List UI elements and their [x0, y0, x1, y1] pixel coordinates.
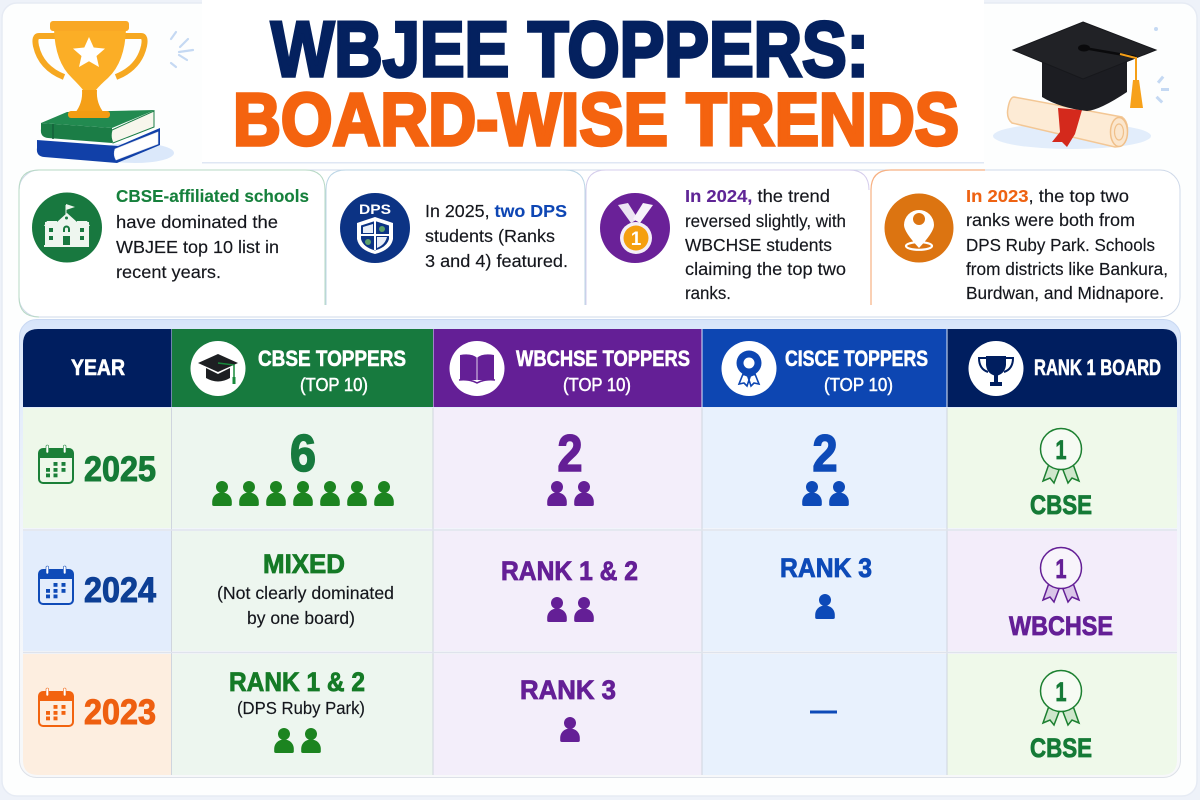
- CISCE result 2023: none: [810, 710, 837, 714]
- CBSE result 2023: (DPS Ruby Park): [237, 698, 365, 718]
- text: DPS insight: 3 and 4) featured.: [425, 251, 568, 271]
- text: 2024 insight: WBCHSE students: [685, 235, 832, 255]
- year 2024: 2024: [84, 571, 156, 610]
- panel: DPS insight: [326, 170, 585, 305]
- year 2023: 2023: [84, 693, 156, 732]
- rank 1 badge: WBCHSE 2024: WBCHSE: [1009, 611, 1113, 641]
- CISCE count 2025: 2: [812, 425, 838, 483]
- header: rank 1 board: RANK 1 BOARD: [1034, 355, 1161, 380]
- table header: [23, 329, 1177, 407]
- panel: 2023 insight: [871, 170, 1168, 305]
- icon: trophy on books: [35, 21, 174, 163]
- CBSE result 2024: (Not clearly dominated: [217, 583, 394, 603]
- WBCHSE result 2024: RANK 1 & 2: [501, 556, 638, 586]
- CBSE result 2023: [229, 667, 365, 753]
- panel: 2024 insight: [586, 170, 869, 305]
- CISCE count 2025: [802, 425, 849, 506]
- text: 2023 insight: [966, 186, 1168, 303]
- year 2024: [39, 566, 156, 610]
- text: 2024 insight: In 2024, the trend: [685, 186, 830, 206]
- text: CBSE insight: CBSE-affiliated schools: [116, 186, 309, 206]
- header: rank 1 board: [968, 341, 1161, 396]
- text: 2024 insight: [685, 186, 846, 303]
- rank 1 badge: CBSE 2025: 1: [1056, 435, 1066, 465]
- header: WBCHSE toppers: [450, 341, 690, 396]
- WBCHSE count 2025: 2: [558, 425, 582, 483]
- CISCE result 2024: [780, 553, 872, 619]
- icon: sparkle lines left: [171, 32, 193, 67]
- icon: school: [32, 192, 102, 262]
- icon: map pin: [884, 194, 954, 262]
- text: CBSE insight: have dominated the: [116, 212, 278, 232]
- title: BOARD-WISE TRENDS: [233, 78, 959, 161]
- text: 2023 insight: DPS Ruby Park. Schools: [966, 235, 1155, 255]
- header: WBCHSE toppers: (TOP 10): [563, 375, 631, 395]
- header: CBSE toppers: CBSE TOPPERS: [258, 346, 406, 371]
- CBSE result 2024: MIXED: [263, 549, 345, 579]
- row: 2025: [23, 408, 1177, 528]
- CISCE result 2024: RANK 3: [780, 553, 872, 583]
- text: CBSE insight: [116, 186, 309, 282]
- text: 2023 insight: ranks were both from: [966, 210, 1135, 230]
- text: DPS insight: students (Ranks: [425, 226, 555, 246]
- icon: DPS crest: DPS: [359, 201, 391, 217]
- text: CBSE insight: recent years.: [116, 262, 221, 282]
- rank 1 badge: CBSE 2023: [1030, 670, 1092, 763]
- WBCHSE count 2025: [547, 425, 594, 506]
- header: CISCE toppers: [722, 341, 928, 396]
- icon: medal: [600, 193, 670, 263]
- text: 2024 insight: reversed slightly, with: [685, 211, 846, 231]
- text: DPS insight: [425, 201, 568, 271]
- icon: graduation cap and scroll: [993, 22, 1156, 149]
- panel: comparison table: [20, 320, 1180, 778]
- rank 1 badge: CBSE 2025: CBSE: [1030, 490, 1092, 520]
- title: [202, 0, 984, 164]
- text: DPS insight: In 2025, two DPS: [425, 201, 567, 221]
- year 2023: [39, 688, 156, 732]
- panel: key insights: [19, 170, 1180, 317]
- CBSE result 2023: RANK 1 & 2: [229, 667, 365, 697]
- header: WBCHSE toppers: WBCHSE TOPPERS: [516, 346, 690, 371]
- rank 1 badge: WBCHSE 2024: 1: [1056, 554, 1066, 584]
- icon: sparkle marks right: [1154, 27, 1169, 104]
- icon: DPS crest: [340, 193, 410, 263]
- rank 1 badge: CBSE 2025: [1030, 428, 1092, 520]
- CBSE result 2024: by one board): [247, 608, 355, 628]
- icon: medal: 1: [631, 229, 642, 250]
- year 2025: 2025: [84, 450, 156, 489]
- header: CISCE toppers: CISCE TOPPERS: [785, 346, 928, 371]
- text: 2024 insight: ranks.: [685, 283, 731, 303]
- rank 1 badge: WBCHSE 2024: [1009, 548, 1113, 641]
- WBCHSE result 2023: [520, 675, 616, 742]
- rank 1 badge: CBSE 2023: CBSE: [1030, 733, 1092, 763]
- header: CISCE toppers: (TOP 10): [824, 375, 893, 395]
- CBSE count 2025: 6: [290, 425, 316, 483]
- title: WBJEE TOPPERS:: [271, 5, 869, 93]
- text: CBSE insight: WBJEE top 10 list in: [116, 237, 279, 257]
- text: 2023 insight: from districts like Bankura,: [966, 259, 1168, 279]
- text: 2024 insight: claiming the top two: [685, 259, 846, 279]
- header: CBSE toppers: (TOP 10): [300, 375, 368, 395]
- CBSE count 2025: [212, 425, 394, 506]
- header: year: YEAR: [71, 355, 125, 380]
- rank 1 badge: CBSE 2023: 1: [1056, 677, 1066, 707]
- row: 2023: [23, 654, 1177, 775]
- row: 2024: [23, 531, 1177, 651]
- text: 2023 insight: Burdwan, and Midnapore.: [966, 283, 1164, 303]
- CBSE result 2024: [217, 549, 394, 628]
- panel: CBSE insight: [19, 170, 325, 317]
- WBCHSE result 2024: [501, 556, 638, 622]
- text: 2023 insight: In 2023, the top two: [966, 186, 1129, 206]
- header: CBSE toppers: [190, 341, 406, 396]
- WBCHSE result 2023: RANK 3: [520, 675, 616, 705]
- year 2025: [39, 445, 156, 489]
